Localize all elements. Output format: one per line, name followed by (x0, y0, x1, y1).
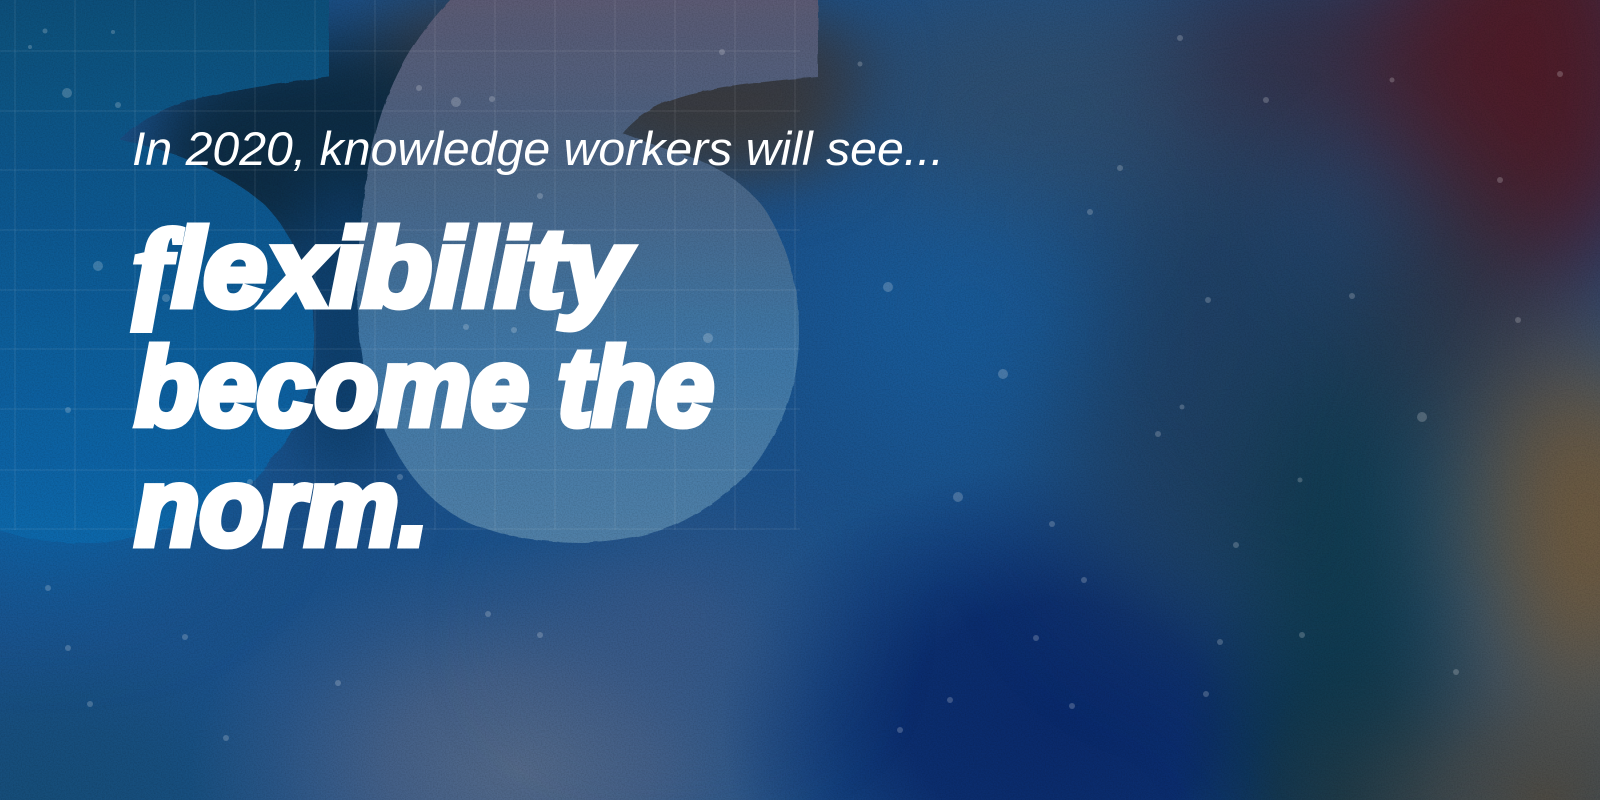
headline (134, 207, 714, 569)
blueprint grid (0, 0, 800, 530)
icon: right quotation mark (357, 0, 818, 543)
headline line 1: flexibility (134, 207, 633, 330)
headline line 3: norm. (135, 446, 428, 569)
dark shadow behind quote marks (150, 0, 870, 480)
icon: left quotation mark (0, 0, 329, 543)
headline line 2: become the (135, 326, 714, 449)
intro text: In 2020, knowledge workers will see... (132, 122, 944, 175)
